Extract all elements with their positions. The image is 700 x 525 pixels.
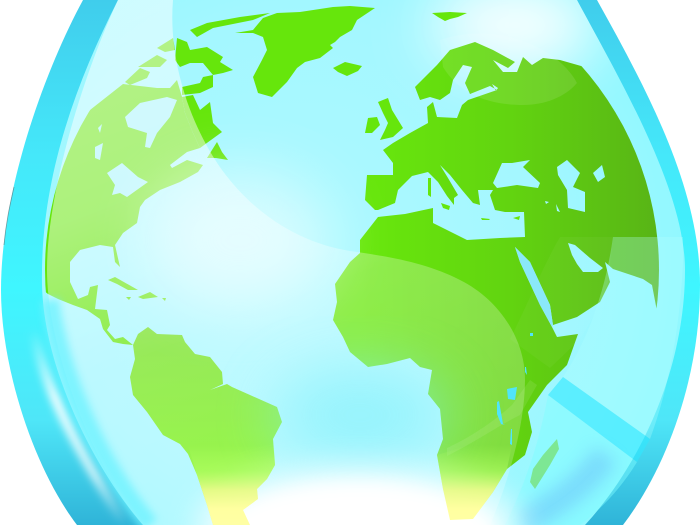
land: Madagascar	[530, 439, 559, 489]
lakes of East Africa	[497, 333, 533, 445]
light band across the Horn of Africa	[510, 237, 613, 368]
chevron band in southern Africa	[447, 380, 537, 456]
cyan band along lower left of water	[50, 300, 150, 525]
bottom glow: white light core	[218, 481, 498, 525]
southern South America tip	[194, 450, 275, 525]
land: South America	[130, 327, 282, 525]
bottom glow: wide soft white light	[195, 465, 525, 525]
dark edge line on left of drop	[4, 187, 14, 245]
blue shade near bottom right rim	[520, 455, 606, 525]
lakes: Hudson Bay and Great Lakes	[95, 97, 177, 197]
cyan shade in the South Atlantic	[275, 370, 445, 460]
land: Svalbard	[432, 12, 467, 21]
highlight circle over Scandinavia	[442, 42, 577, 105]
southern Africa tip	[437, 453, 510, 520]
land: Eurasia and Africa	[333, 42, 659, 510]
lower light sector at lower right	[505, 395, 637, 525]
southern tips of continents lit by the glow	[188, 445, 512, 525]
land: British Isles	[365, 98, 403, 140]
soft glow in central ocean	[150, 170, 330, 310]
upper light sector at lower right	[598, 237, 683, 439]
glass veil: light sweep over left of globe	[47, 0, 525, 525]
land: Canadian arctic and Labrador	[30, 13, 270, 345]
land: Caribbean islands	[108, 277, 166, 301]
water highlight at top right of globe	[430, 0, 600, 70]
white streak on lower left rim	[34, 330, 125, 525]
cyan band between the sectors	[548, 377, 650, 462]
land: Mediterranean islands	[428, 178, 520, 220]
land: Greenland and Iceland	[235, 6, 375, 97]
Red Sea tint	[515, 247, 553, 327]
North American mainland	[30, 80, 203, 345]
arctic islands	[125, 68, 150, 85]
